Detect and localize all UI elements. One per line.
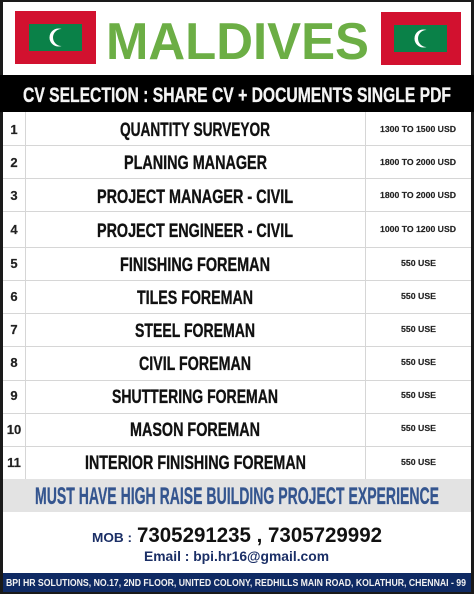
row 10 [7,419,437,441]
icon: right Maldives flag [381,12,461,65]
mobile label: MOB : [92,530,132,545]
row 2: PLANING MANAGER [124,152,267,174]
row 4: 1000 TO 1200 USD [380,225,456,234]
row 6: 6 [10,289,18,304]
row 7: 550 USE [401,325,437,334]
panel: contact details [3,512,471,573]
row 7: 7 [10,322,18,337]
row 7 [10,320,437,342]
row 1: 1 [10,122,18,137]
mobile numbers: 7305291235 , 7305729992 [137,524,382,547]
row 1: QUANTITY SURVEYOR [120,119,270,141]
row 11: INTERIOR FINISHING FOREMAN [85,452,306,474]
panel: header [3,2,471,75]
row 8: 550 USE [401,358,437,367]
panel: job table [3,112,471,479]
row 5 [10,254,437,276]
row 3: PROJECT MANAGER - CIVIL [97,186,293,208]
row 9: 550 USE [401,391,437,400]
row 5: FINISHING FOREMAN [120,254,270,276]
row 3: 1800 TO 2000 USD [380,191,456,200]
footer address bar [3,573,471,592]
row 8: CIVIL FOREMAN [139,353,251,375]
row 11: 550 USE [401,458,437,467]
row 9 [10,386,437,408]
email: Email : bpi.hr16@gmail.com [144,548,329,564]
row 4 [10,220,456,242]
row 4: 4 [10,222,18,237]
row 5: 5 [10,256,18,271]
row 3: 3 [10,188,18,203]
row 6 [10,287,437,309]
row 1: 1300 TO 1500 USD [380,125,456,134]
row 10: MASON FOREMAN [130,419,260,441]
row 2: 1800 TO 2000 USD [380,158,456,167]
row 8: 8 [10,355,18,370]
row 9: SHUTTERING FOREMAN [112,386,278,408]
icon: left Maldives flag [15,11,96,64]
title: MALDIVES [106,13,369,71]
row 10: 10 [7,422,21,437]
row 3 [10,186,456,208]
row 11: 11 [7,455,21,470]
row 7: STEEL FOREMAN [135,320,255,342]
row 10: 550 USE [401,424,437,433]
row 5: 550 USE [401,259,437,268]
heading bar [0,75,474,112]
row 2: 2 [10,155,18,170]
row 1 [10,119,456,141]
row 4: PROJECT ENGINEER - CIVIL [97,220,293,242]
row 8 [10,353,437,375]
row 9: 9 [10,388,18,403]
row 6: TILES FOREMAN [137,287,253,309]
row 2 [10,152,456,174]
row 6: 550 USE [401,292,437,301]
